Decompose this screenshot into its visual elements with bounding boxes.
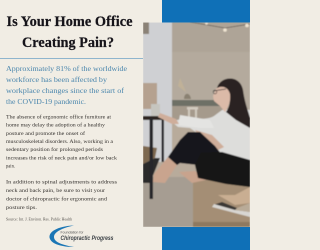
background	[0, 0, 250, 250]
body paragraph two: In addition to spinal adjustments to address	[6, 180, 117, 186]
body paragraph one: musculoskeletal disorders. Also, working in a	[6, 139, 114, 145]
wood floor	[192, 179, 250, 223]
rug	[143, 177, 193, 227]
hair	[217, 78, 250, 128]
highlighted statistic text	[6, 65, 127, 106]
glasses	[213, 89, 226, 91]
black trousers	[168, 132, 222, 165]
body paragraph two: posture tips.	[6, 205, 38, 211]
body paragraph one: home may delay the adoption of a healthy	[6, 122, 105, 129]
light left wall panel	[143, 22, 172, 162]
logo: Foundation for Chiropractic Progress	[50, 226, 114, 247]
body paragraph one: pain.	[6, 164, 15, 170]
stack of books	[212, 187, 250, 217]
table legs	[150, 118, 153, 199]
body paragraph two: doctor of chiropractic for ergonomic and	[6, 195, 107, 202]
highlighted statistic text: workforce has been affected by	[6, 76, 108, 84]
arm and hand	[158, 113, 179, 124]
mug	[151, 104, 160, 117]
black shelf	[143, 158, 160, 183]
highlighted statistic text: workplace changes since the start of	[6, 87, 125, 95]
body paragraph one	[6, 114, 117, 170]
logo: Foundation for Chiropractic Progress: Foundation for	[60, 230, 84, 234]
logo swoosh	[50, 226, 74, 247]
blue block top	[162, 0, 250, 22]
highlighted statistic text: the COVID-19 pandemic.	[6, 98, 86, 106]
highlighted statistic text: Approximately 81% of the worldwide	[6, 65, 127, 73]
feet	[153, 157, 177, 183]
title	[6, 14, 133, 51]
logo: Foundation for Chiropractic Progress: Chiropractic Progress	[60, 235, 114, 242]
string lights	[190, 22, 250, 32]
face	[213, 87, 230, 112]
title: Creating Pain?	[22, 35, 114, 51]
source note: Source: Int. J. Environ. Res. Public Health	[6, 218, 72, 222]
lower wall and rug behind	[172, 124, 220, 172]
body paragraph one: posture and promote the onset of	[6, 130, 85, 137]
wall	[172, 52, 250, 110]
body paragraph two	[6, 180, 117, 211]
grey bench and shelf	[172, 100, 227, 106]
vase with dried plant	[184, 94, 191, 99]
wall niche	[143, 83, 157, 109]
table top	[143, 116, 165, 120]
body paragraph one: increases the risk of neck pain and/or low back	[6, 154, 117, 161]
body paragraph two: neck and back pain, be sure to visit your	[6, 188, 105, 194]
body paragraph one: The absence of ergonomic office furniture at	[6, 114, 111, 120]
blue block bottom	[162, 227, 250, 250]
title: Is Your Home Office	[6, 14, 133, 30]
photo: woman sitting on floor working at a low table	[143, 22, 250, 227]
body paragraph one: sedentary position for prolonged periods	[6, 146, 103, 153]
shirt	[172, 108, 250, 162]
basket	[143, 146, 157, 164]
